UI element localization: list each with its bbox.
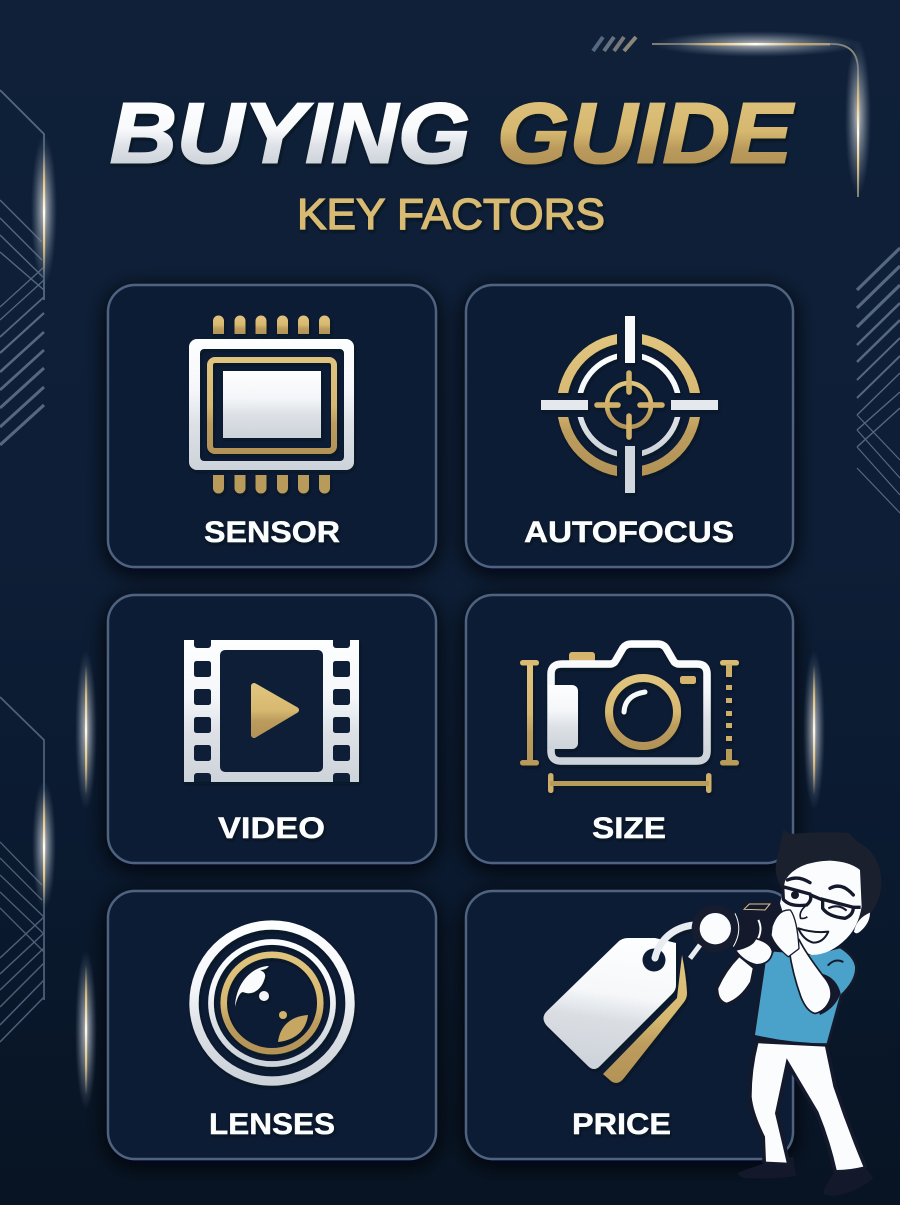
decoration: left upper lines [0, 90, 44, 445]
icon: camera with dimensions [520, 644, 739, 793]
title: BUYING [110, 86, 470, 182]
nose and mouth [800, 905, 807, 918]
panel: price [466, 891, 793, 1159]
icon: price tag [544, 925, 694, 1083]
face [780, 861, 862, 955]
label: video: VIDEO [218, 812, 325, 845]
ear [854, 913, 870, 933]
icon: sensor chip [189, 316, 354, 494]
decoration: left lower lines [0, 697, 44, 1042]
label: autofocus: AUTOFOCUS [524, 516, 734, 549]
eye [791, 891, 799, 899]
icon: film strip [184, 640, 359, 782]
panel: autofocus [466, 285, 793, 567]
label: sensor: SENSOR [204, 516, 340, 549]
shoes [738, 1157, 873, 1196]
eyebrows [787, 878, 853, 895]
icon: lens [194, 925, 350, 1081]
forearm [790, 940, 830, 1013]
decoration: slashes [593, 37, 636, 51]
glasses [783, 887, 861, 918]
label: price: PRICE [572, 1108, 671, 1141]
left arm [718, 957, 753, 1003]
decoration: glows [31, 135, 825, 1110]
hands [737, 939, 772, 964]
strap [690, 945, 700, 958]
icon: focus target [541, 316, 718, 493]
panel: sensor [108, 285, 436, 567]
panel: video [108, 595, 436, 863]
hair [776, 830, 881, 933]
camera body [730, 900, 783, 953]
shirt [755, 948, 855, 1043]
lens barrel [692, 905, 761, 952]
sleeve band [810, 974, 841, 1015]
label: lenses: LENSES [209, 1108, 335, 1141]
title: GUIDE [497, 86, 795, 182]
decoration: right lines [857, 248, 900, 513]
trousers [752, 1043, 863, 1170]
panel: lenses [108, 891, 436, 1159]
title [110, 86, 795, 182]
subtitle: KEY FACTORS [297, 190, 605, 239]
label: size: SIZE [592, 812, 666, 845]
panel: size [466, 595, 793, 863]
illustration: photographer [690, 830, 881, 1196]
decoration: corner frame [652, 31, 871, 197]
